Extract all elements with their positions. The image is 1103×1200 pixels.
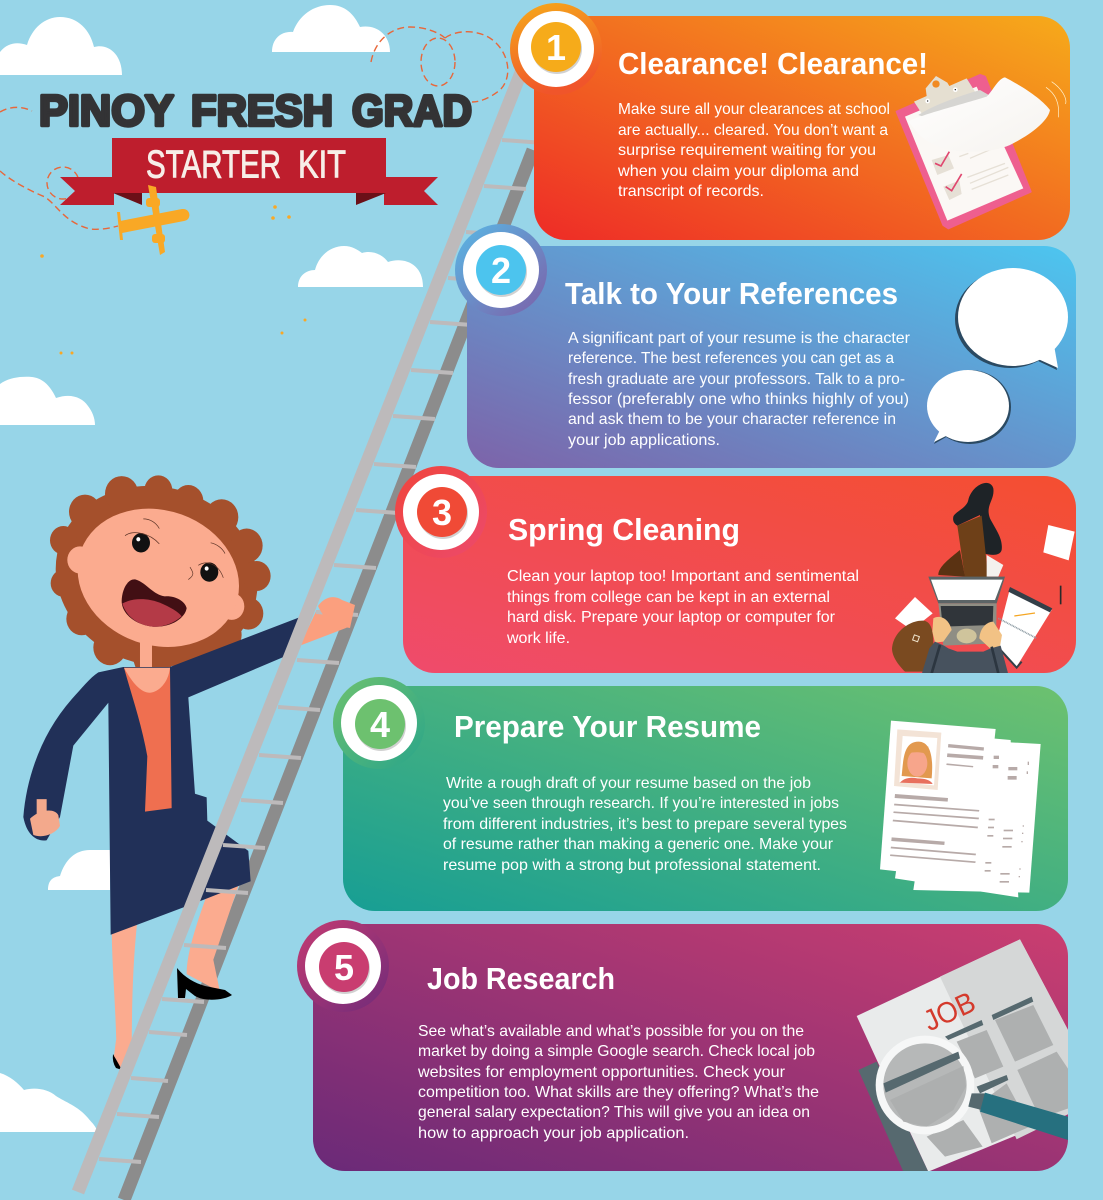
panel 2 body text: reference. The best references you can get as a	[568, 350, 894, 367]
dashed flight paths	[0, 27, 508, 229]
panel 2 body text	[568, 330, 911, 449]
panel 1 body text: surprise requirement waiting for you	[618, 142, 876, 159]
ladder rungs	[99, 140, 544, 1162]
panel 1 body text	[617, 101, 890, 200]
icon: newspaper and magnifying glass: JOB	[918, 986, 981, 1038]
panel 2 body text: fessor (preferably one who thinks highly of you)	[568, 391, 909, 408]
clouds	[0, 5, 423, 1132]
reaching hand wrist	[300, 610, 350, 646]
ribbon banner: Starter Kit	[60, 138, 438, 205]
badge 2	[455, 224, 547, 316]
fingers on ladder	[318, 597, 355, 628]
badge 3	[395, 466, 487, 558]
badge 4: 4	[370, 704, 390, 745]
panel 1 body text: transcript of records.	[618, 183, 764, 200]
title: Pinoy Fresh Grad: GRAD	[352, 86, 472, 136]
hair	[40, 466, 273, 686]
panel 4 body text: resume pop with a strong but professional statement.	[443, 857, 821, 874]
panel 4 body text	[443, 775, 847, 874]
panel 4 body text: of resume rather than making a generic one. Make your	[443, 836, 834, 853]
icon: speech bubbles	[927, 268, 1068, 444]
badge 4	[333, 677, 425, 769]
black shoe	[177, 968, 232, 1000]
icon: person with laptop from above	[892, 483, 1075, 674]
panel 5 body text	[417, 1023, 819, 1142]
panel 4: resume	[333, 677, 1068, 911]
title: Pinoy Fresh Grad: PINOY	[39, 86, 173, 136]
panel 1 body text: Make sure all your clearances at school	[618, 101, 890, 118]
panel 5 body text: general salary expectation? This will give you an idea on	[418, 1104, 810, 1121]
panel 2 body text: and ask them to be your character reference in	[568, 411, 896, 428]
panel 5 body text: websites for employment opportunities. Check your	[417, 1064, 786, 1081]
badge 3: 3	[432, 492, 452, 533]
blouse	[124, 668, 172, 812]
icon: clipboard	[897, 75, 1066, 228]
panel 5 heading: Job Research	[427, 961, 615, 996]
ribbon banner: Starter Kit: KIT	[298, 144, 346, 186]
panel 4 body text: Write a rough draft of your resume based on the job	[446, 775, 811, 792]
jacket and skirt	[23, 617, 300, 935]
panel 3 body text	[506, 568, 859, 647]
bent leg	[187, 881, 240, 992]
fist	[30, 799, 60, 836]
ribbon banner: Starter Kit: STARTER	[146, 144, 281, 186]
badge 5	[297, 920, 389, 1012]
icon: newspaper and magnifying glass	[857, 939, 1073, 1172]
panel 3 heading: Spring Cleaning	[508, 512, 740, 547]
small shoe	[113, 1054, 122, 1070]
panel 2 body text: your job applications.	[568, 432, 720, 449]
character: woman climbing	[23, 466, 350, 1067]
panel 3 body text: Clean your laptop too! Important and sentimental	[507, 568, 859, 585]
panel 5 body text: market by doing a simple Google search. Check local job	[418, 1043, 815, 1060]
open mouth	[122, 579, 187, 627]
panel 1 body text: when you claim your diploma and	[617, 163, 859, 180]
badge 1	[510, 3, 602, 95]
panel 2: references	[455, 224, 1076, 468]
panel 5: job research	[297, 920, 1073, 1172]
ladder front rail	[78, 70, 522, 1192]
left leg	[112, 921, 137, 1067]
panel 4 body text: from different industries, it’s best to prepare several types	[443, 816, 847, 833]
panel 1: clearance	[510, 3, 1070, 240]
title: Pinoy Fresh Grad: FRESH	[191, 86, 333, 136]
ankle of left leg	[114, 1040, 130, 1068]
panel 5 body text: See what’s available and what’s possible for you on the	[418, 1023, 804, 1040]
panel 3: spring cleaning	[395, 466, 1076, 674]
panel 3 body text: things from college can be kept in an external	[507, 589, 830, 606]
icon: orange airplane	[117, 185, 189, 255]
orange sparkles	[40, 102, 306, 354]
panel 2 heading: Talk to Your References	[565, 276, 898, 311]
badge 1: 1	[546, 27, 566, 68]
ladder back rail	[124, 150, 533, 1200]
head	[64, 491, 253, 665]
panel 4 heading: Prepare Your Resume	[454, 709, 761, 744]
panel 3 body text: work life.	[506, 630, 570, 647]
panel 4 body text: you’ve seen through research. If you’re interested in jobs	[443, 795, 839, 812]
panel 2 body text: A significant part of your resume is the character	[568, 330, 911, 347]
panel 3 body text: hard disk. Prepare your laptop or computer for	[507, 609, 836, 626]
neck	[140, 638, 152, 674]
eyes	[125, 519, 225, 582]
panel 2 body text: fresh graduate are your professors. Talk to a pro-	[568, 371, 905, 388]
panel 5 body text: competition too. What skills are they offering? What’s the	[418, 1084, 819, 1101]
badge 5: 5	[334, 947, 354, 988]
panel 1 heading: Clearance! Clearance!	[618, 46, 928, 81]
panel 5 body text: how to approach your job application.	[418, 1125, 689, 1142]
badge 2: 2	[491, 250, 511, 291]
panel 1 body text: are actually... cleared. You don’t want a	[618, 122, 888, 139]
icon: resume pages	[880, 721, 1041, 897]
